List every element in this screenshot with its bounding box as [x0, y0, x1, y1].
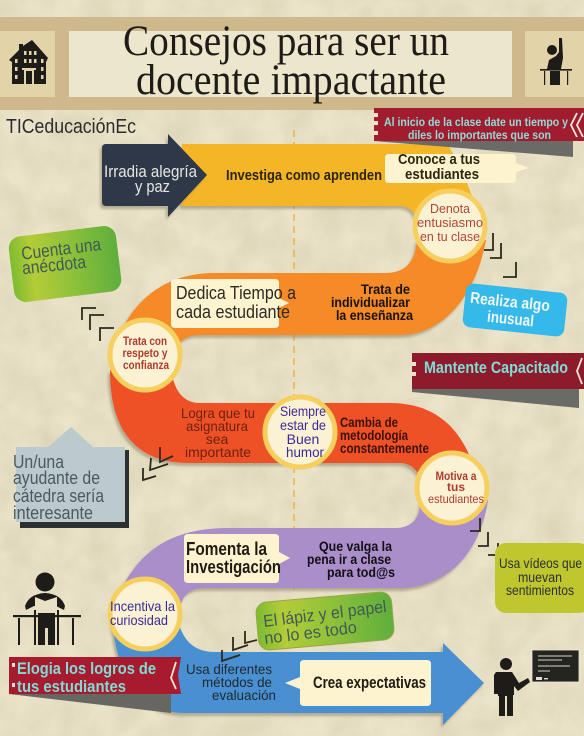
- text: logra que tu asignatura: [181, 405, 255, 460]
- bubble: conoce a tus estudiantes: [385, 151, 529, 183]
- text: trata de individualizar: Trata de: [361, 282, 410, 297]
- text: que valga la pena: pena ir a clase: [307, 552, 391, 567]
- banner: elogia los logros: tus estudiantes: [17, 677, 126, 696]
- text: que valga la pena: [307, 539, 395, 580]
- circle: trata con respeto: respeto y: [122, 346, 168, 360]
- circle: siempre de buen humor: [265, 397, 335, 467]
- text: cambia de metodologia: Cambia de: [340, 414, 398, 430]
- circle: siempre de buen humor: estar de: [280, 417, 326, 433]
- circle: motiva a tus estudiantes: estudiantes: [428, 492, 484, 506]
- bubble: dedica tiempo: [171, 279, 297, 328]
- bubble: conoce a tus estudiantes: estudiantes: [405, 166, 479, 183]
- bubble: dedica tiempo: cada estudiante: [176, 302, 290, 322]
- bubble: crea expectativas: [285, 660, 431, 706]
- circle: trata con respeto: Trata con: [123, 334, 167, 348]
- title: docente impactante: [136, 57, 446, 104]
- text: que valga la pena: Que valga la: [319, 539, 392, 554]
- bubble: fomenta la investigacion: Investigación: [186, 557, 281, 577]
- circle: siempre de buen humor: Siempre: [280, 403, 326, 419]
- circle: denota entusiasmo: entusiasmo: [417, 215, 483, 230]
- dashed center line: [293, 130, 295, 590]
- arrows: to cuenta una anecdota: [82, 308, 114, 341]
- circle: trata con respeto: confianza: [123, 358, 169, 372]
- text: trata de individualizar: individualizar: [331, 295, 411, 310]
- icon: student raising hand: [540, 38, 572, 85]
- bubble: fomenta la investigacion: Fomenta la: [186, 539, 268, 559]
- circle: motiva a tus estudiantes: [417, 453, 487, 523]
- text: cambia de metodologia: [340, 414, 429, 456]
- circle: denota entusiasmo: en tu clase: [420, 229, 480, 244]
- circle: incentiva la curiosidad: curiosidad: [110, 612, 168, 628]
- circle: incentiva la curiosidad: [110, 579, 180, 649]
- callout: el lapiz y el papel: El lápiz y el papel: [262, 597, 388, 631]
- callout: ayudante de catedra: [13, 427, 129, 528]
- header band: [0, 17, 584, 110]
- callout: cuenta una anecdota: [7, 225, 123, 303]
- text: cambia de metodologia: metodología: [340, 427, 408, 443]
- callout: ayudante de catedra: Un/una: [13, 452, 65, 472]
- ribbon: orange: [112, 240, 486, 355]
- text: logra que tu asignatura: importante: [185, 444, 251, 460]
- callout: el lapiz y el papel: [255, 591, 395, 651]
- ribbon: yellow: [182, 144, 482, 226]
- ribbon: purple: [112, 500, 488, 610]
- circle: siempre de buen humor: humor: [286, 444, 324, 460]
- icon: student reading: [13, 572, 81, 645]
- banner: inicio de la clase: [374, 108, 584, 157]
- callout: realiza algo inusual: [462, 283, 568, 337]
- banner: mantente capacitado: [412, 353, 584, 408]
- text: trata de individualizar: la enseñanza: [336, 308, 413, 323]
- text: investiga: Investiga como aprenden: [226, 167, 382, 184]
- circle: trata con respeto: [110, 320, 180, 390]
- text: usa diferentes metodos: métodos de: [202, 674, 272, 690]
- banner: elogia los logros: [9, 657, 181, 713]
- arrow: dark start arrow: y paz: [135, 177, 170, 196]
- callout: ayudante de catedra: ayudante de: [13, 468, 100, 488]
- banner: inicio de la clase: diles lo importantes que son: [408, 128, 551, 142]
- callout: usa videos: [495, 543, 584, 613]
- circle: motiva a tus estudiantes: Motiva a: [436, 469, 477, 483]
- title: Consejos para ser un: [123, 18, 449, 65]
- text: trata de individualizar: [331, 282, 413, 323]
- ribbon: blue arrow: [112, 620, 484, 725]
- text: usa diferentes metodos: Usa diferentes: [186, 661, 272, 677]
- text: usa diferentes metodos: evaluación: [212, 687, 276, 703]
- handle text: TICeducaciónEc: [6, 116, 136, 138]
- callout: usa videos: sentimientos: [506, 582, 574, 598]
- ribbon: red: [110, 370, 480, 490]
- callout: ayudante de catedra: cátedra sería: [13, 486, 105, 506]
- arrows: to realiza algo inusual: [484, 233, 516, 277]
- callout: realiza algo inusual: inusual: [486, 309, 535, 330]
- arrow: dark start arrow: [102, 134, 207, 217]
- arrow: dark start arrow: Irradia alegría: [104, 162, 197, 181]
- text: logra que tu asignatura: Logra que tu: [181, 405, 255, 421]
- title: [123, 18, 449, 104]
- callout: realiza algo inusual: Realiza algo: [469, 290, 551, 315]
- circle: denota entusiasmo: Denota: [430, 201, 471, 216]
- callout: usa videos: muevan: [518, 569, 562, 585]
- arrows: to usa diferentes metodos: [222, 631, 257, 661]
- circle: siempre de buen humor: Buen: [287, 431, 319, 447]
- arrows: to ayudante de catedra: [143, 447, 173, 480]
- bubble: dedica tiempo: Dedica Tiempo a: [176, 283, 297, 303]
- icon: school: [9, 40, 48, 84]
- icon: teacher at blackboard: [494, 650, 579, 716]
- bubble: conoce a tus estudiantes: Conoce a tus: [398, 151, 480, 168]
- text: que valga la pena: para tod@s: [327, 565, 395, 580]
- callout: cuenta una anecdota: Cuenta una: [20, 234, 103, 264]
- circle: incentiva la curiosidad: Incentiva la: [110, 598, 175, 614]
- circle: motiva a tus estudiantes: tus: [447, 480, 465, 494]
- text: logra que tu asignatura: sea: [206, 431, 228, 447]
- text: usa diferentes metodos: [186, 661, 276, 703]
- circle: denota entusiasmo: [415, 191, 485, 261]
- bubble: crea expectativas: Crea expectativas: [313, 673, 426, 692]
- bubble: fomenta la investigacion: [184, 534, 290, 583]
- banner: elogia los logros: Elogia los logros de: [17, 659, 156, 678]
- text: logra que tu asignatura: asignatura: [186, 418, 248, 434]
- arrows: to usa videos: [470, 518, 498, 555]
- callout: ayudante de catedra: interesante: [13, 503, 93, 523]
- callout: cuenta una anecdota: anécdota: [21, 252, 88, 278]
- text: cambia de metodologia: constantemente: [340, 440, 429, 456]
- callout: el lapiz y el papel: no lo es todo: [263, 618, 358, 648]
